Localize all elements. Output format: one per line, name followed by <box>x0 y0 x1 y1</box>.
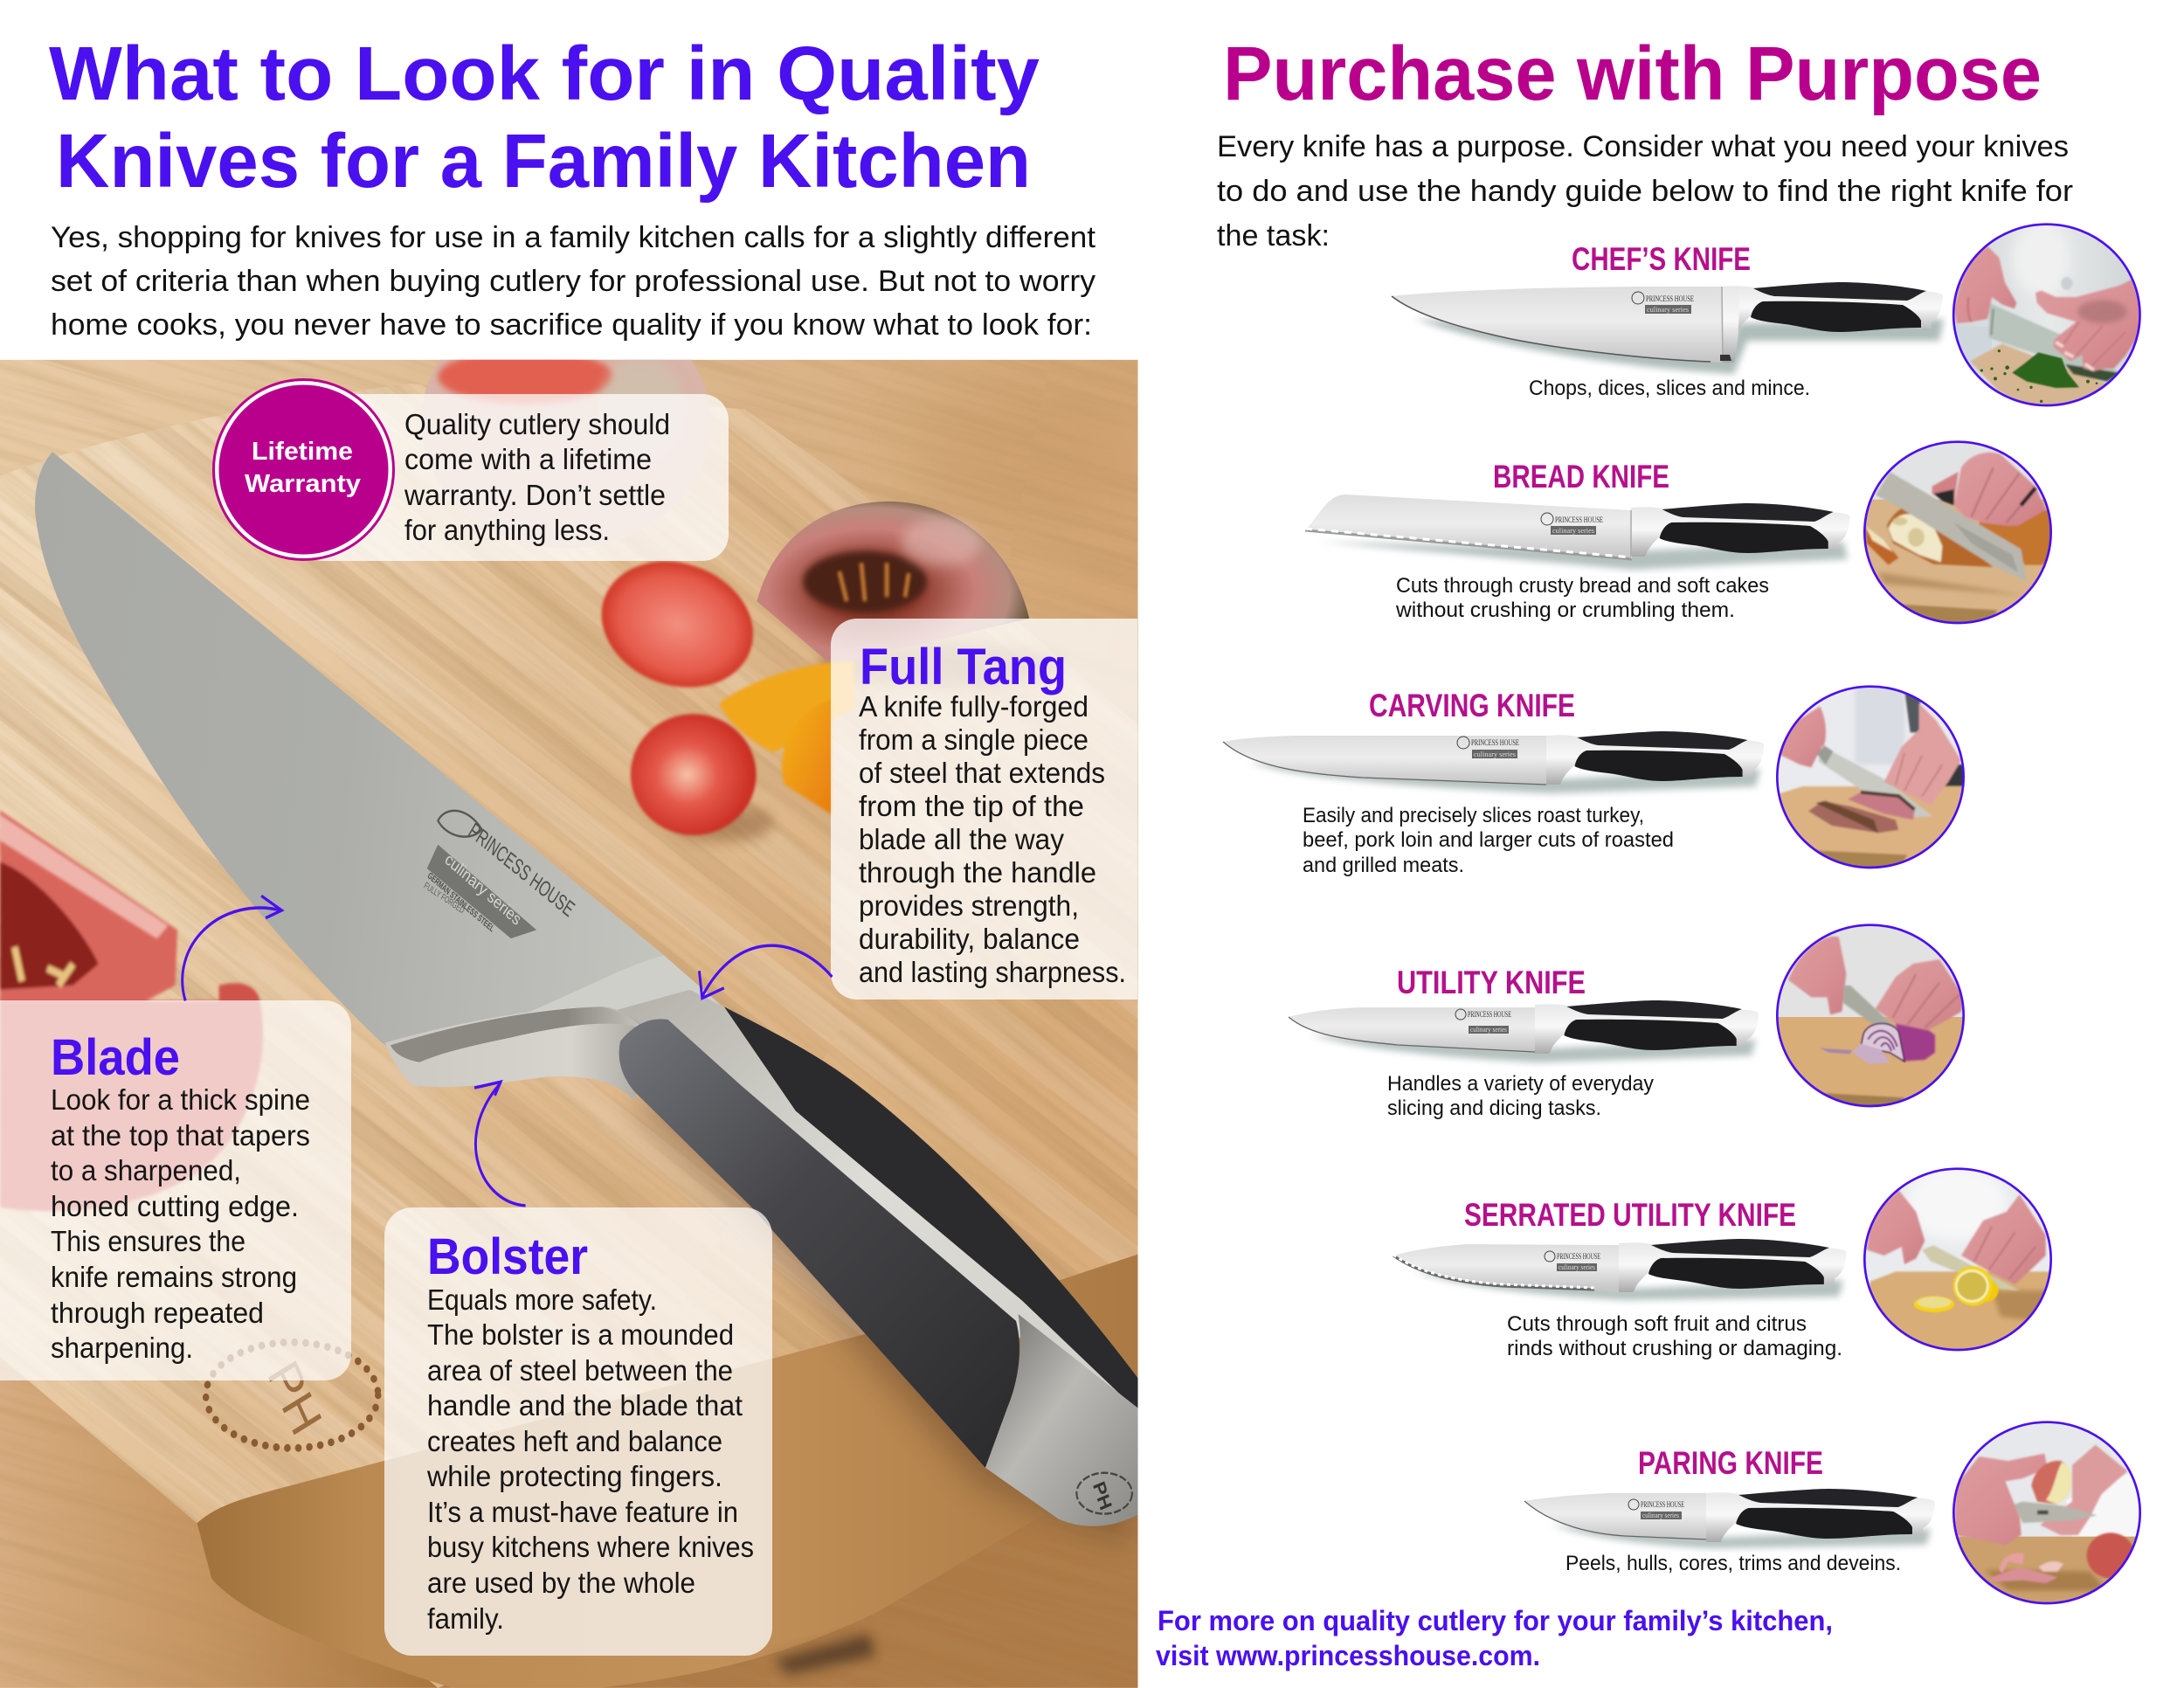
panel: paring knife: PARING KNIFE <box>1638 1445 1823 1481</box>
intro text: right column: the task: <box>1217 219 1330 253</box>
panel: bread knife <box>1305 459 1849 622</box>
panel: paring knife: Peels, hulls, cores, trims and deveins. <box>1565 1552 1901 1575</box>
panel: bolster: busy kitchens where knives <box>427 1531 754 1563</box>
footer: website call to action: visit www.princesshouse.com. <box>1156 1640 1540 1671</box>
panel: full tang: and lasting sharpness. <box>859 956 1126 988</box>
panel: bolster: It’s a must-have feature in <box>427 1496 738 1528</box>
panel: bolster: Equals more safety. <box>427 1283 657 1316</box>
knife: utility: PRINCESS HOUSE <box>1468 1010 1511 1019</box>
photo circle: chef's knife chopping herbs <box>1952 223 2141 407</box>
intro text: right column <box>1217 130 2073 253</box>
intro text: left column: Yes, shopping for knives for use in a family kitchen calls for a slightly different <box>51 221 1096 254</box>
knife: chef's: culinary series <box>1647 306 1689 314</box>
panel: chef's knife: CHEF’S KNIFE <box>1572 241 1751 277</box>
tomato: red half <box>599 561 755 690</box>
panel: lifetime warranty: Quality cutlery should <box>404 408 670 440</box>
knife: utility <box>1289 1000 1759 1062</box>
knife handle and bolster <box>385 990 1138 1526</box>
panel: carving knife: Easily and precisely slices roast turkey, <box>1303 804 1644 827</box>
knife: carving: culinary series <box>1474 751 1516 758</box>
intro text: left column: home cooks, you never have to sacrifice quality if you know what to look for: <box>51 308 1092 342</box>
knife: bread <box>1305 495 1849 570</box>
panel: full tang: through the handle <box>859 856 1096 889</box>
panel: paring knife <box>1524 1445 1935 1575</box>
arrow: bolster <box>474 1082 526 1206</box>
panel: bolster: creates heft and balance <box>427 1425 722 1457</box>
panel: blade: at the top that tapers <box>51 1119 310 1152</box>
panel: lifetime warranty: for anything less. <box>404 514 610 546</box>
knife: chef's: PRINCESS HOUSE <box>1646 294 1694 303</box>
intro text: left column <box>51 221 1096 342</box>
footer: website call to action <box>1156 1605 1833 1671</box>
tomato: yellow wedges <box>719 661 854 814</box>
knife: chef's <box>1392 282 1944 374</box>
panel: carving knife: beef, pork loin and larger cuts of roasted <box>1303 828 1674 852</box>
panel: bolster <box>384 1207 772 1656</box>
arrow: full tang <box>699 945 832 999</box>
panel: serrated utility knife: SERRATED UTILITY KNIFE <box>1464 1197 1796 1233</box>
panel: chef's knife <box>1392 241 1944 400</box>
panel: blade: This ensures the <box>51 1225 245 1257</box>
panel: full tang: from the tip of the <box>859 790 1084 822</box>
panel: blade: Look for a thick spine <box>51 1083 310 1116</box>
panel: bread knife: without crushing or crumbling them. <box>1395 598 1735 622</box>
badge: lifetime warranty <box>213 379 393 559</box>
knife blade: PRINCESS HOUSE <box>465 819 578 922</box>
tomato: left wedge <box>0 811 263 1211</box>
panel: bolster: The bolster is a mounded <box>427 1318 734 1351</box>
panel: blade: sharpening. <box>51 1332 193 1364</box>
panel: blade: to a sharpened, <box>51 1154 241 1186</box>
knife: paring: culinary series <box>1642 1512 1679 1519</box>
photo circle: paring knife peeling potato <box>1952 1421 2141 1604</box>
knife blade <box>35 452 722 1062</box>
tomato: pale half behind warranty <box>425 360 708 540</box>
badge: lifetime warranty: Lifetime <box>252 438 353 466</box>
panel: utility knife: slicing and dicing tasks. <box>1387 1097 1601 1120</box>
knife: paring: PRINCESS HOUSE <box>1641 1500 1684 1509</box>
panel: full tang: from a single piece <box>859 723 1089 756</box>
knife: utility: culinary series <box>1470 1026 1507 1034</box>
knife: paring <box>1524 1489 1935 1548</box>
panel: blade: through repeated <box>51 1297 264 1329</box>
knife blade: GERMAN STAINLESS STEEL <box>425 871 495 935</box>
title: quality knives: Knives for a Family Kitchen <box>56 119 1031 204</box>
knife: bread: culinary series <box>1552 527 1594 535</box>
intro text: left column: set of criteria than when buying cutlery for professional use. But not to worry <box>51 265 1095 298</box>
photo circle: carving knife slicing roast <box>1776 685 1965 868</box>
photo circle: utility knife cutting onion <box>1776 924 1965 1108</box>
panel: full tang: Full Tang <box>860 639 1067 695</box>
panel: full tang <box>831 619 1137 1000</box>
tomato: dark heirloom <box>757 502 1066 688</box>
panel: blade: Blade <box>51 1029 180 1086</box>
intro text: right column: Every knife has a purpose. Consider what you need your knives <box>1217 130 2069 163</box>
knife: carving <box>1223 731 1764 793</box>
panel: lifetime warranty: warranty. Don’t settle <box>404 479 666 511</box>
panel: carving knife <box>1223 688 1764 877</box>
knife shadow <box>628 1075 1138 1545</box>
intro text: right column: to do and use the handy guide below to find the right knife for <box>1217 175 2073 208</box>
panel: utility knife <box>1289 965 1759 1120</box>
photo circle: serrated knife slicing lemon <box>1863 1167 2052 1351</box>
panel: lifetime warranty <box>213 379 729 561</box>
panel: bolster: family. <box>427 1602 504 1635</box>
photo: chef knife on cutting board <box>0 295 1138 1688</box>
footer: website call to action: For more on quality cutlery for your family’s kitchen, <box>1158 1605 1833 1636</box>
title: quality knives: What to Look for in Quality <box>49 31 1040 116</box>
panel: serrated utility knife: rinds without crushing or damaging. <box>1507 1337 1842 1360</box>
panel: full tang: blade all the way <box>859 823 1064 855</box>
arrow: blade <box>183 896 282 1000</box>
title: quality knives <box>49 31 1040 204</box>
badge: lifetime warranty: Warranty <box>245 470 361 498</box>
panel: serrated utility knife <box>1393 1197 1847 1360</box>
cutting board brand mark <box>206 1342 378 1448</box>
panel: full tang: durability, balance <box>859 923 1080 955</box>
knife blade: FULLY FORGED <box>422 881 466 917</box>
panel: utility knife: Handles a variety of everyday <box>1387 1072 1654 1096</box>
panel: full tang: provides strength, <box>859 889 1079 922</box>
knife blade: culinary series <box>442 849 524 929</box>
panel: serrated utility knife: Cuts through soft fruit and citrus <box>1507 1312 1807 1336</box>
panel: blade <box>0 1000 351 1380</box>
panel: full tang: of steel that extends <box>859 757 1105 789</box>
panel: bolster: while protecting fingers. <box>426 1460 722 1492</box>
panel: bolster: are used by the whole <box>427 1567 695 1599</box>
panel: carving knife: and grilled meats. <box>1303 854 1464 877</box>
photo circle: bread knife slicing loaf <box>1863 440 2052 624</box>
panel: full tang: A knife fully-forged <box>859 690 1089 723</box>
panel: bolster: Bolster <box>427 1228 588 1285</box>
heading: purchase with purpose: Purchase with Purpose <box>1223 31 2042 116</box>
panel: blade: knife remains strong <box>51 1261 297 1293</box>
cutting board brand mark: PH <box>258 1352 332 1444</box>
panel: bread knife: Cuts through crusty bread and soft cakes <box>1396 574 1769 598</box>
knife: serrated utility <box>1393 1239 1847 1300</box>
panel: utility knife: UTILITY KNIFE <box>1397 965 1586 1000</box>
cutting board <box>0 384 1138 1688</box>
panel: bread knife: BREAD KNIFE <box>1493 459 1669 495</box>
panel: blade: honed cutting edge. <box>51 1190 299 1222</box>
knife: serrated utility: PRINCESS HOUSE <box>1557 1252 1600 1261</box>
knife handle and bolster: PH <box>1089 1478 1116 1513</box>
tomato: small red half <box>631 714 774 842</box>
panel: bolster: area of steel between the <box>427 1354 733 1387</box>
panel: chef's knife: Chops, dices, slices and mince. <box>1529 377 1810 400</box>
panel: carving knife: CARVING KNIFE <box>1369 688 1575 723</box>
knife: serrated utility: culinary series <box>1559 1263 1595 1271</box>
panel: lifetime warranty: come with a lifetime <box>404 443 652 475</box>
knife: bread: PRINCESS HOUSE <box>1555 515 1603 524</box>
knife: carving: PRINCESS HOUSE <box>1471 738 1519 747</box>
panel: bolster: handle and the blade that <box>427 1389 743 1422</box>
